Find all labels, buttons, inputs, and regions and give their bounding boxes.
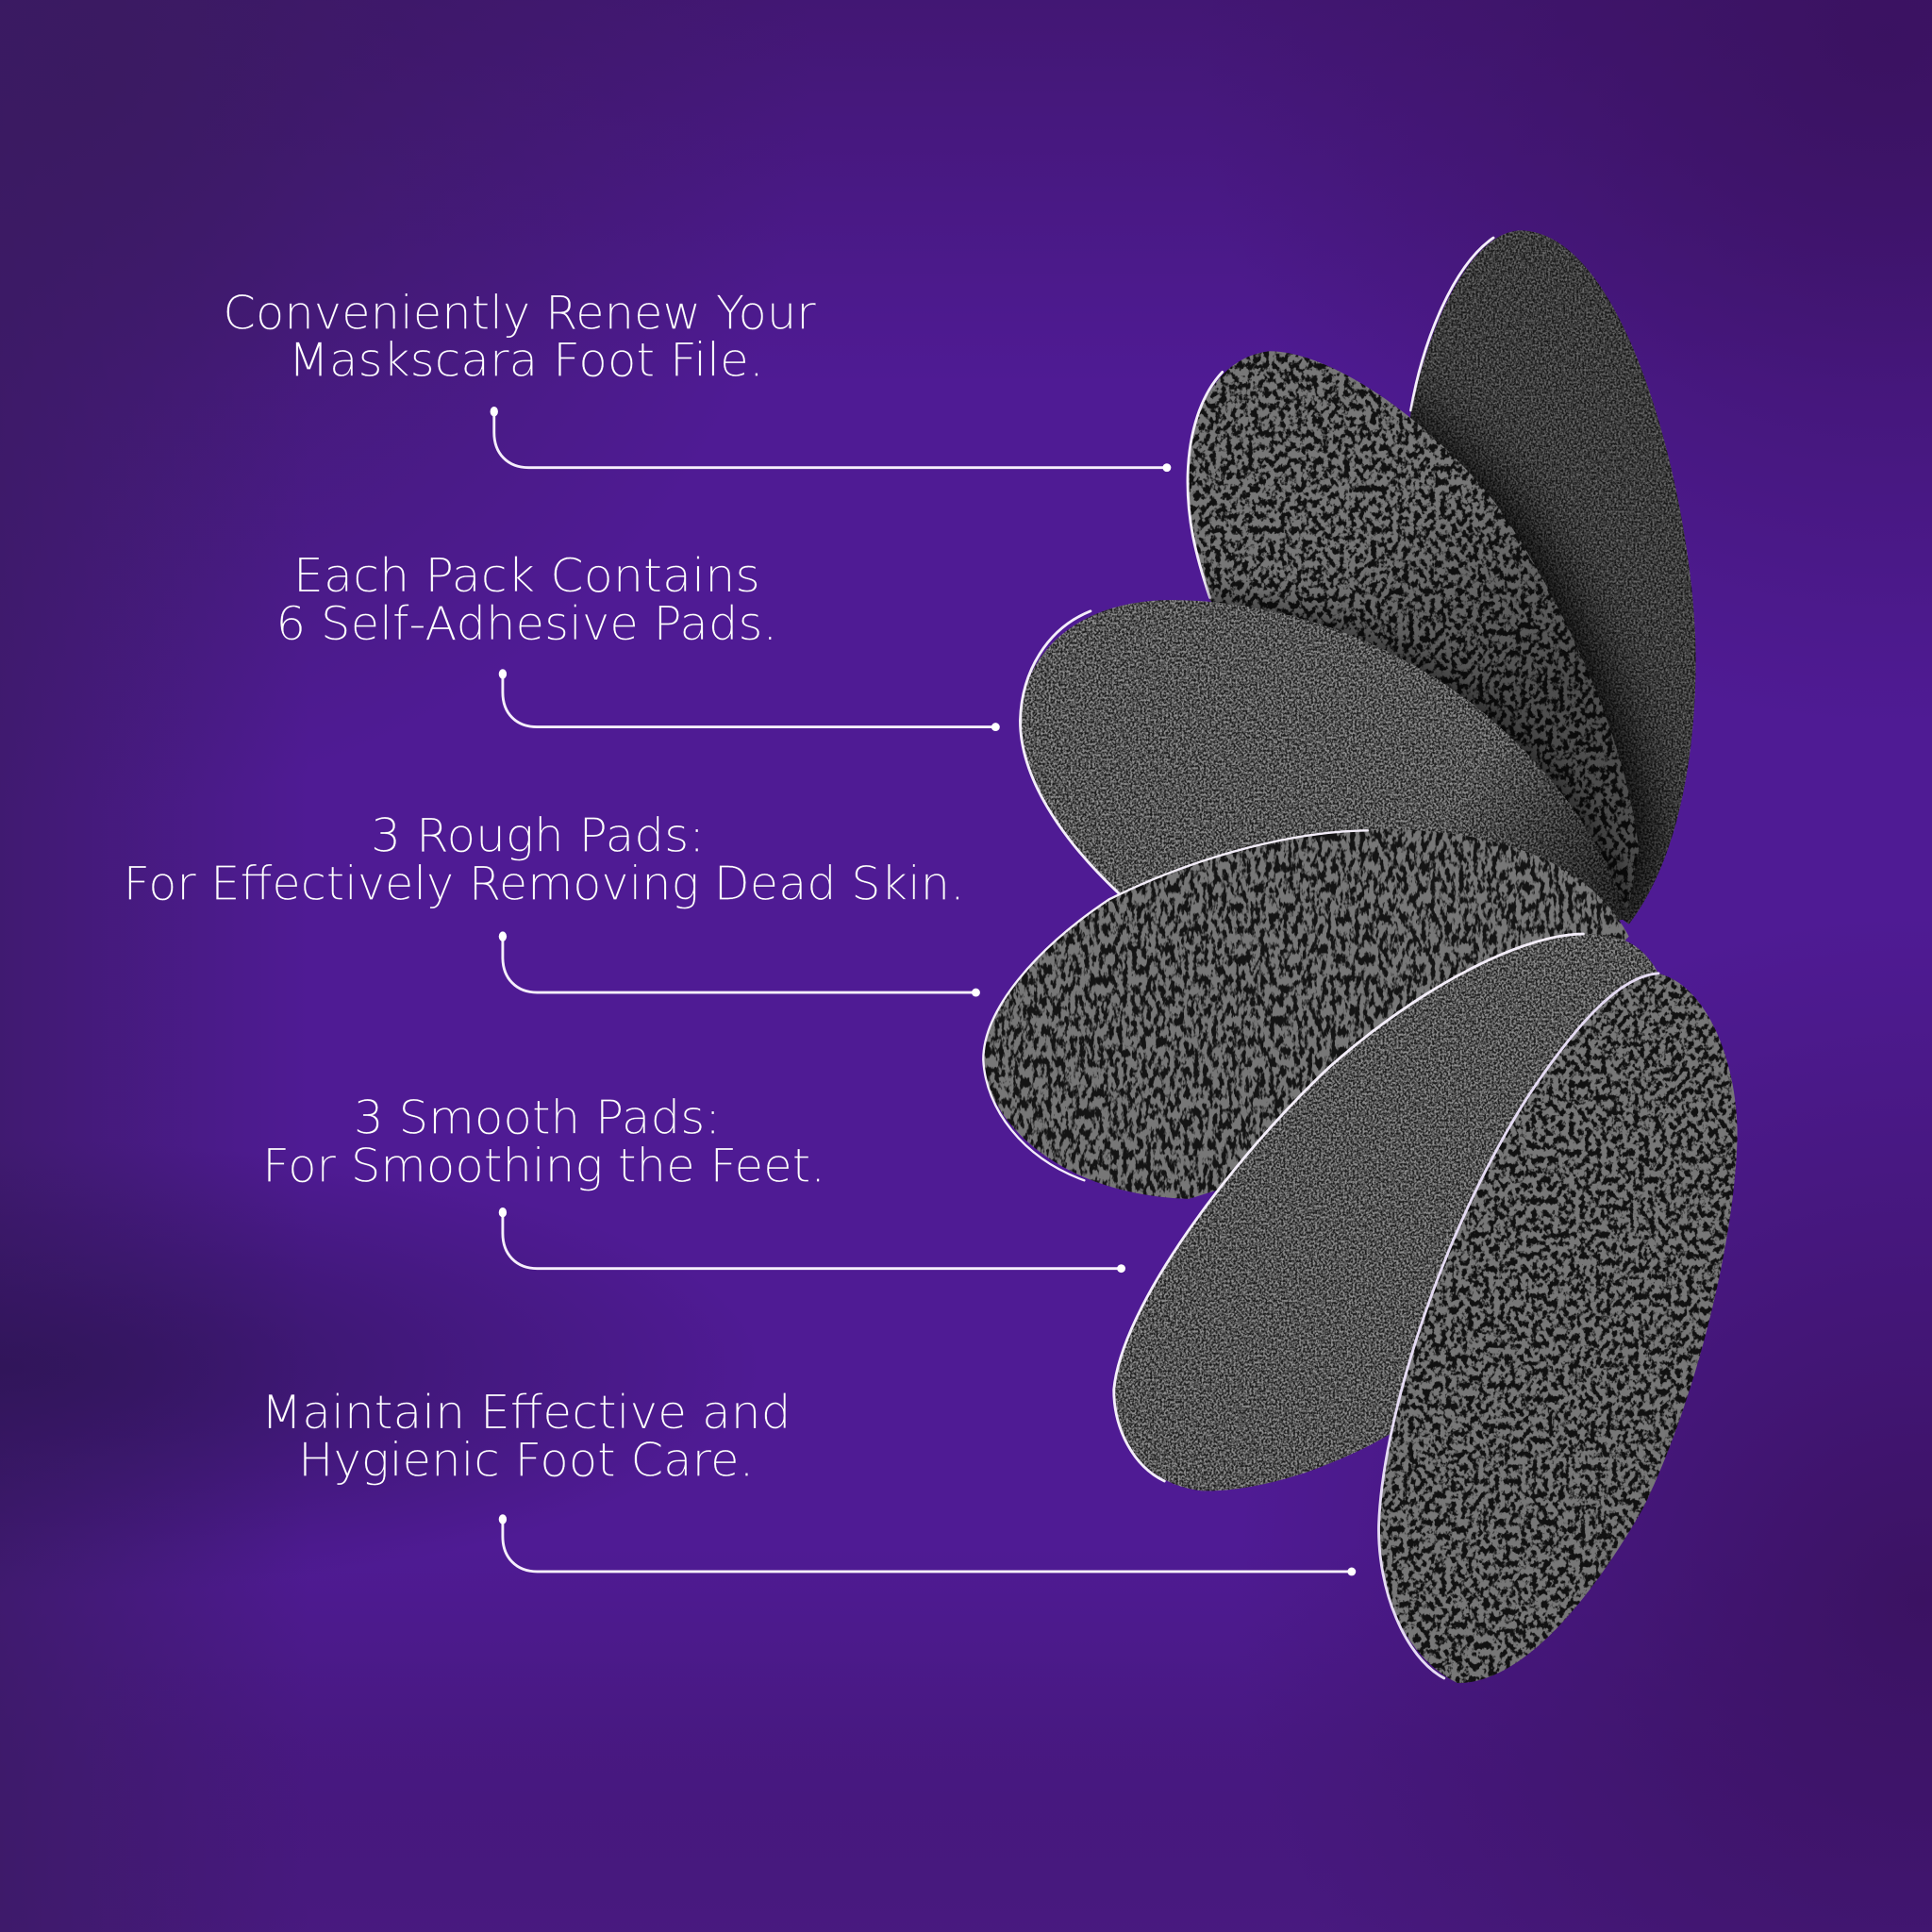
pad 5: smooth long pad	[1114, 934, 1658, 1491]
caption: pack contents: Each Pack Contains	[293, 549, 760, 603]
fan of foot file pads	[983, 230, 1738, 1683]
pad 2: rough upper pad	[1187, 351, 1640, 913]
caption: hygiene: Maintain Effective and	[261, 1386, 791, 1440]
pad 6: rough lower pad	[1378, 974, 1738, 1683]
caption: rough pads: For Effectively Removing Dead Skin.	[124, 857, 965, 910]
caption: rough pads	[124, 809, 965, 910]
leader line 4	[499, 1208, 1125, 1273]
caption: hygiene: Hygienic Foot Care.	[298, 1434, 754, 1488]
pad 1: dark back pad	[1409, 230, 1696, 924]
leader line 3	[499, 931, 980, 997]
leader line 1	[491, 407, 1171, 472]
caption: hygiene	[261, 1386, 791, 1488]
caption: renew	[223, 287, 817, 387]
pad 4: rough wide pad	[983, 829, 1629, 1199]
leader line 5	[499, 1514, 1356, 1575]
caption: smooth pads: For Smoothing the Feet.	[262, 1140, 825, 1193]
caption: renew: Conveniently Renew Your	[223, 287, 817, 341]
caption: renew: Maskscara Foot File.	[289, 333, 764, 387]
caption: rough pads: 3 Rough Pads:	[371, 809, 705, 863]
caption: pack contents: 6 Self-Adhesive Pads.	[276, 597, 777, 651]
caption: smooth pads	[262, 1091, 825, 1193]
leader line 2	[499, 669, 1000, 731]
pad 3: smooth middle pad	[1020, 600, 1629, 986]
caption: smooth pads: 3 Smooth Pads:	[354, 1091, 721, 1145]
caption: pack contents	[276, 549, 777, 651]
